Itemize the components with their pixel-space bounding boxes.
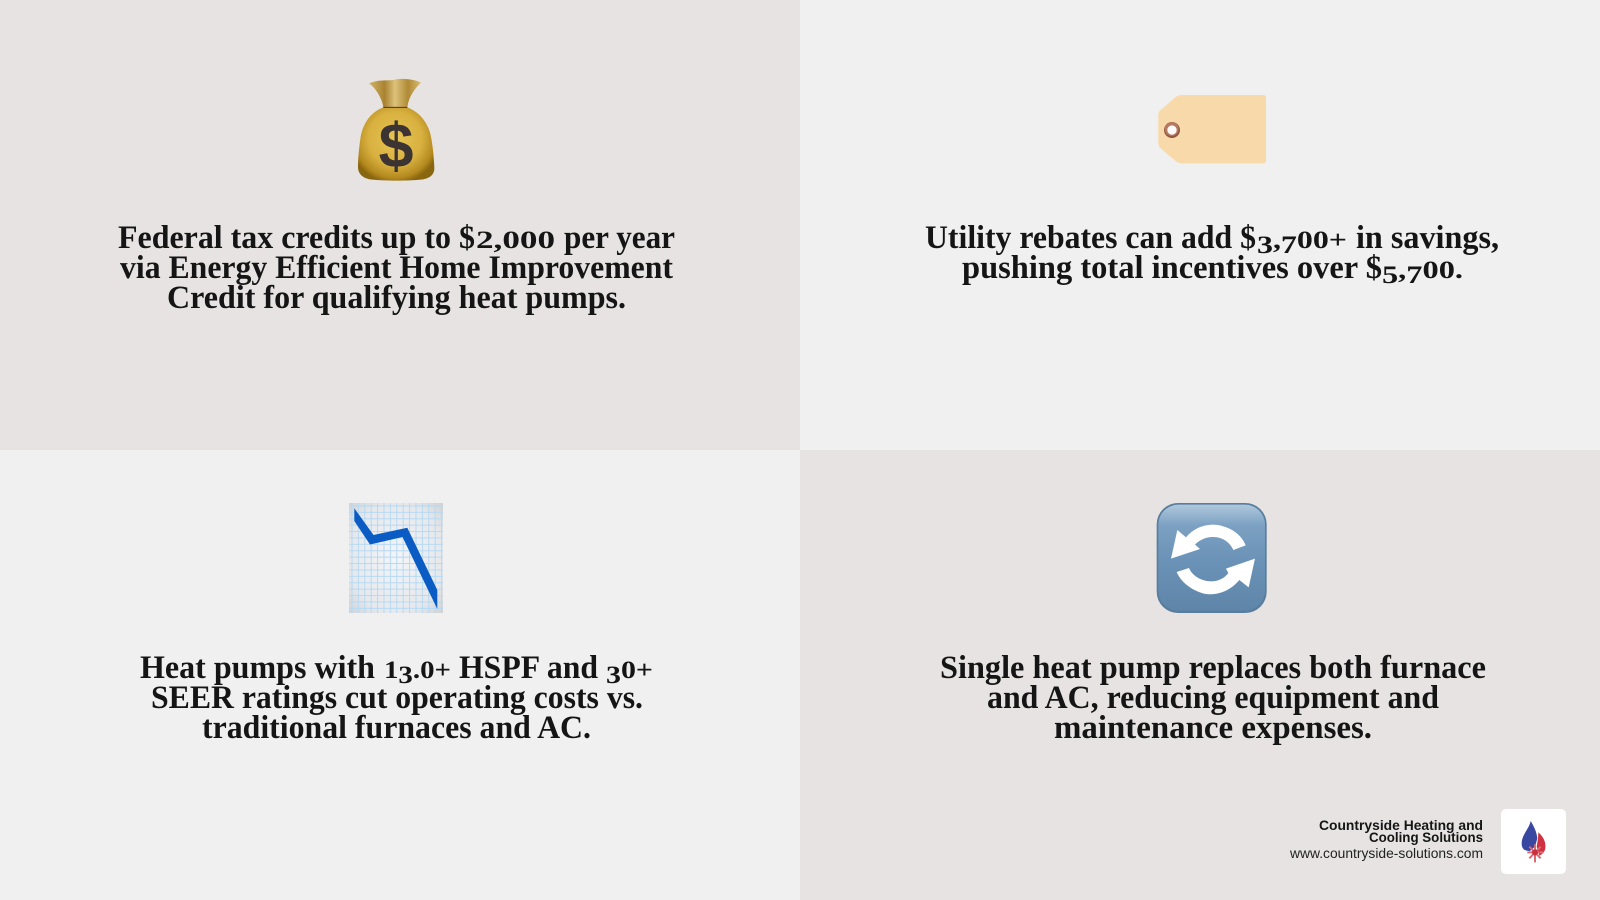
text: operating costs: Heat pumps with bbox=[140, 650, 375, 686]
text: company name: Cooling Solutions bbox=[1369, 830, 1483, 845]
icon: refresh arrows bbox=[1157, 503, 1267, 613]
text: federal tax credits bbox=[118, 220, 675, 316]
text: utility rebates: 7 bbox=[1406, 262, 1422, 289]
text: single system bbox=[940, 650, 1486, 746]
panel: operating costs bbox=[0, 450, 800, 900]
logo card bbox=[1501, 809, 1566, 874]
text: federal tax credits: Credit for qualifying heat pumps. bbox=[167, 280, 626, 316]
icon: money bag bbox=[358, 79, 434, 182]
text: utility rebates: in savings, bbox=[1356, 220, 1499, 256]
footer: company branding bbox=[1289, 809, 1566, 874]
text: company name bbox=[1319, 818, 1483, 845]
text: operating costs: 3 bbox=[606, 662, 621, 689]
text: operating costs: .0+ bbox=[413, 657, 451, 684]
text: utility rebates: , bbox=[1398, 257, 1406, 284]
text: website: www.countryside-solutions.com bbox=[1289, 846, 1483, 861]
icon: price tag bbox=[1158, 95, 1266, 163]
text: single system: and AC, reducing equipment and bbox=[987, 680, 1439, 716]
text: utility rebates: 00. bbox=[1422, 257, 1463, 284]
text: operating costs: SEER ratings cut operating costs vs. bbox=[151, 680, 643, 716]
panel: utility rebates bbox=[800, 0, 1600, 450]
text: utility rebates: , bbox=[1273, 227, 1281, 254]
text: utility rebates: 7 bbox=[1281, 232, 1297, 259]
text: company name: Countryside Heating and bbox=[1319, 818, 1483, 833]
text: utility rebates: Utility rebates can add $ bbox=[925, 220, 1256, 256]
icon: chart decreasing bbox=[349, 503, 443, 613]
text: single system: Single heat pump replaces both furnace bbox=[940, 650, 1486, 686]
text: federal tax credits: via Energy Efficient Home Improvement bbox=[120, 250, 673, 286]
text: federal tax credits: per year bbox=[564, 220, 675, 256]
icon: money bag: $ bbox=[379, 112, 413, 182]
text: single system: maintenance expenses. bbox=[1054, 710, 1372, 746]
panel: federal tax credits bbox=[0, 0, 800, 450]
text: federal tax credits: Federal tax credits up to $ bbox=[118, 220, 475, 256]
text: operating costs: 1 bbox=[384, 657, 396, 684]
text: operating costs: 3 bbox=[398, 662, 413, 689]
text: utility rebates bbox=[925, 220, 1499, 289]
text: operating costs: traditional furnaces and AC. bbox=[202, 710, 591, 746]
text: operating costs: HSPF and bbox=[459, 650, 598, 686]
text: utility rebates: pushing total incentives over $ bbox=[962, 250, 1382, 286]
text: utility rebates: 00+ bbox=[1297, 227, 1347, 254]
panel: single system bbox=[800, 450, 1600, 900]
text: utility rebates: 3 bbox=[1257, 232, 1273, 259]
text: federal tax credits: 2,000 bbox=[476, 227, 555, 254]
text: operating costs bbox=[140, 650, 653, 746]
text: operating costs: 0+ bbox=[621, 657, 653, 684]
text: utility rebates: 5 bbox=[1382, 262, 1398, 289]
